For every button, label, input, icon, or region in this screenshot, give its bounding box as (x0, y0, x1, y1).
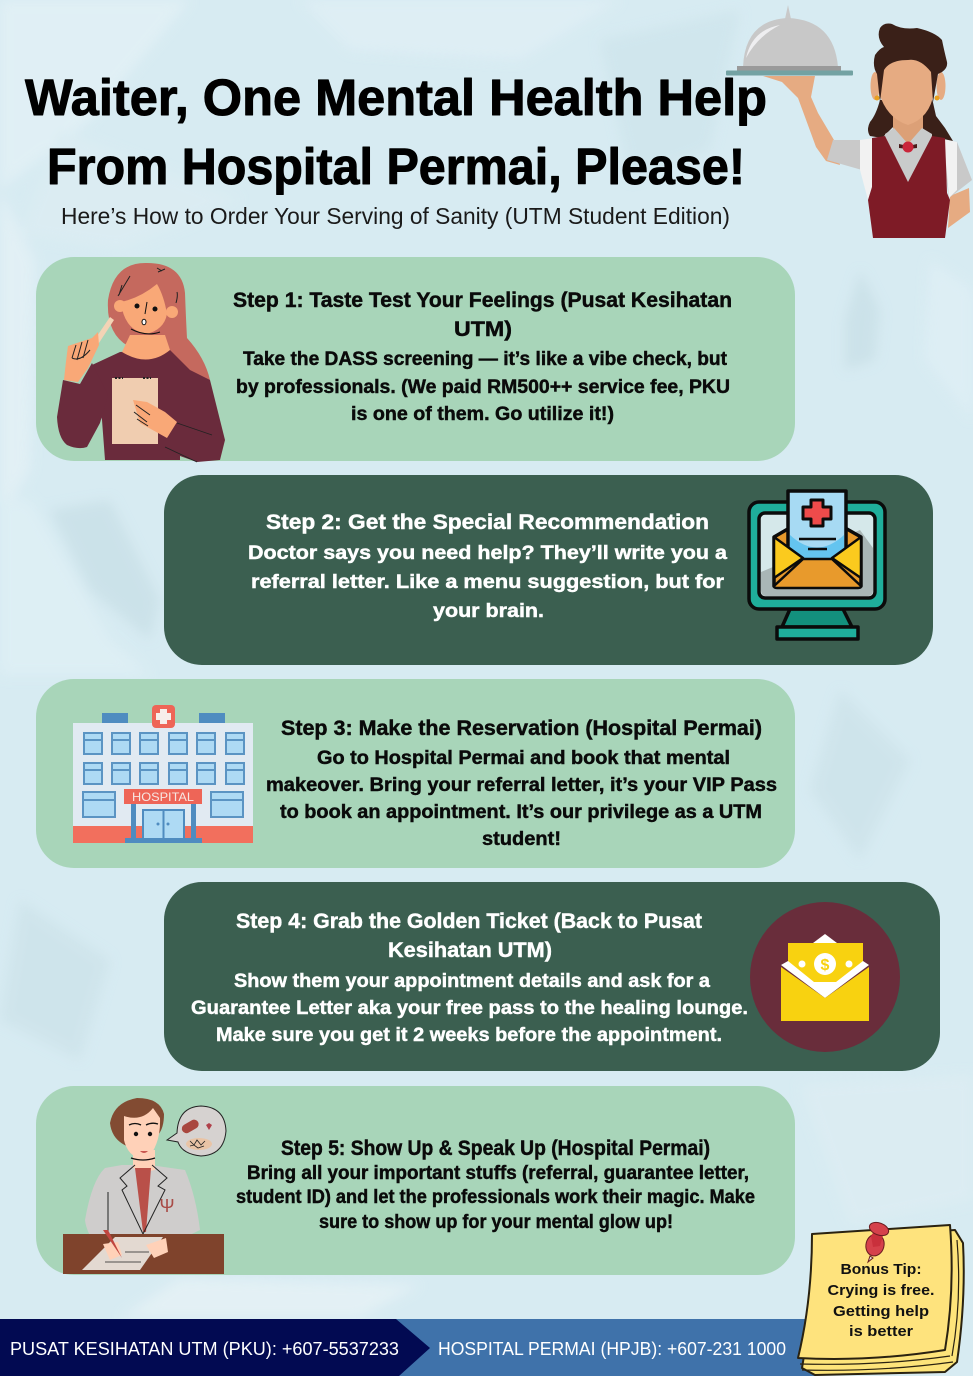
step 2 text: your brain. (433, 601, 544, 622)
step 2 text: referral letter. Like a menu suggestion, but for (251, 572, 725, 593)
step 4 text: Show them your appointment details and ask for a (234, 971, 710, 992)
earrings (874, 96, 880, 100)
step 5 text: student ID) and let the professionals work their magic. Make (236, 1187, 755, 1208)
step 1 text: is one of them. Go utilize it!) (351, 404, 614, 425)
bonus tip text: is better (849, 1323, 913, 1340)
contact: PKU: PUSAT KESIHATAN UTM (PKU): +607-5537233 (10, 1338, 399, 1359)
step 5 text: Bring all your important stuffs (referral, guarantee letter, (247, 1163, 749, 1184)
notepad (112, 378, 158, 444)
coat (85, 1165, 200, 1253)
illustration: woman with notepad (57, 263, 225, 462)
hospital cross sign (152, 705, 175, 728)
bonus tip text: Bonus Tip: (840, 1261, 922, 1278)
paper (82, 1237, 163, 1270)
step 2 text: Doctor says you need help? They’ll write you a (248, 543, 727, 564)
face (879, 59, 934, 125)
ears (114, 300, 126, 312)
panel: step 4 (164, 882, 940, 1071)
windows (83, 733, 244, 817)
ears (870, 72, 880, 100)
hair back (868, 98, 953, 141)
pen (103, 1230, 122, 1258)
step 1 text: by professionals. (We paid RM500++ service fee, PKU (236, 377, 730, 398)
step 4 text: Step 4: Grab the Golden Ticket (Back to Pusat (236, 910, 702, 933)
step 3 text: to book an appointment. It’s our privilege as a UTM (280, 802, 762, 823)
step 5 text: Step 5: Show Up & Speak Up (Hospital Permai) (281, 1137, 710, 1160)
panel: step 2 (164, 475, 933, 665)
step 1 text (233, 289, 732, 425)
sticky note: bonus tip (798, 1220, 964, 1375)
panel: step 5 (36, 1086, 795, 1275)
hands (103, 1242, 122, 1260)
illustration: psychologist at desk (63, 1098, 226, 1274)
step 3 text: student! (482, 829, 561, 850)
step 4 text: Kesihatan UTM) (388, 939, 552, 962)
face details (134, 304, 140, 308)
hair (108, 263, 210, 408)
face details (134, 1132, 138, 1136)
sleeves (827, 140, 862, 170)
hospital sign: HOSPITAL (132, 790, 194, 804)
hand (133, 400, 177, 438)
step 1 text: Step 1: Taste Test Your Feelings (Pusat Kesihatan (233, 289, 732, 312)
icon: envelope with money (750, 902, 900, 1052)
fringe lines (118, 268, 177, 303)
bonus tip text (828, 1261, 934, 1340)
thought bubble (167, 1106, 226, 1156)
step 3 text (266, 717, 777, 850)
hair (874, 24, 947, 102)
step 1 text: UTM) (454, 318, 512, 341)
step 3 text: Step 3: Make the Reservation (Hospital Permai) (281, 717, 762, 740)
shirt collar (885, 128, 932, 182)
step 2 text (248, 511, 727, 622)
subtitle: Here’s How to Order Your Serving of Sanity (UTM Student Edition) (61, 203, 730, 229)
bonus tip text: Crying is free. (828, 1282, 934, 1299)
right arm (948, 188, 970, 228)
icon: monitor with referral letter (749, 491, 885, 639)
panel: step 3 (36, 679, 795, 868)
step 4 text: Guarantee Letter aka your free pass to the healing lounge. (191, 998, 748, 1019)
step 3 text: makeover. Bring your referral letter, it’s your VIP Pass (266, 775, 777, 796)
step 3 text: Go to Hospital Permai and book that mental (317, 748, 730, 769)
icon: red pin (863, 1220, 890, 1262)
tie (899, 142, 917, 152)
sweater arm (57, 363, 108, 448)
hair (110, 1098, 164, 1148)
step 5 text (236, 1137, 755, 1233)
cloche and tray (726, 5, 853, 76)
neck and face (133, 1150, 155, 1172)
illustration: hospital building (73, 705, 253, 843)
step 1 text: Take the DASS screening — it’s like a vibe check, but (243, 349, 728, 370)
desk (63, 1234, 224, 1274)
step 4 text (191, 910, 748, 1046)
sweater body (92, 350, 225, 462)
psi symbol: Ψ (159, 1196, 175, 1216)
lapels (108, 1165, 167, 1240)
bonus tip text: Getting help (833, 1303, 929, 1320)
footer bar: contact numbers (0, 1319, 815, 1376)
face (121, 284, 167, 334)
step 4 text: Make sure you get it 2 weeks before the appointment. (216, 1025, 722, 1046)
hospital sign (124, 789, 202, 804)
entrance (125, 804, 202, 843)
contact: hospital: HOSPITAL PERMAI (HPJB): +607-231 1000 (438, 1338, 786, 1359)
title: Waiter, One Mental Health Help (25, 69, 767, 126)
vest (868, 136, 950, 238)
neck (893, 112, 923, 142)
shirt (135, 1168, 151, 1232)
icon: envelope with money: $ (821, 957, 830, 974)
step 2 text: Step 2: Get the Special Recommendation (266, 511, 709, 534)
step 5 text: sure to show up for your mental glow up! (319, 1212, 673, 1233)
title: From Hospital Permai, Please! (47, 138, 745, 195)
title (25, 69, 767, 195)
pencil and hand (74, 317, 114, 375)
illustration: waiter with cloche (726, 5, 972, 238)
panel: step 1 (36, 257, 795, 462)
arm (763, 76, 840, 165)
neck (122, 335, 170, 360)
